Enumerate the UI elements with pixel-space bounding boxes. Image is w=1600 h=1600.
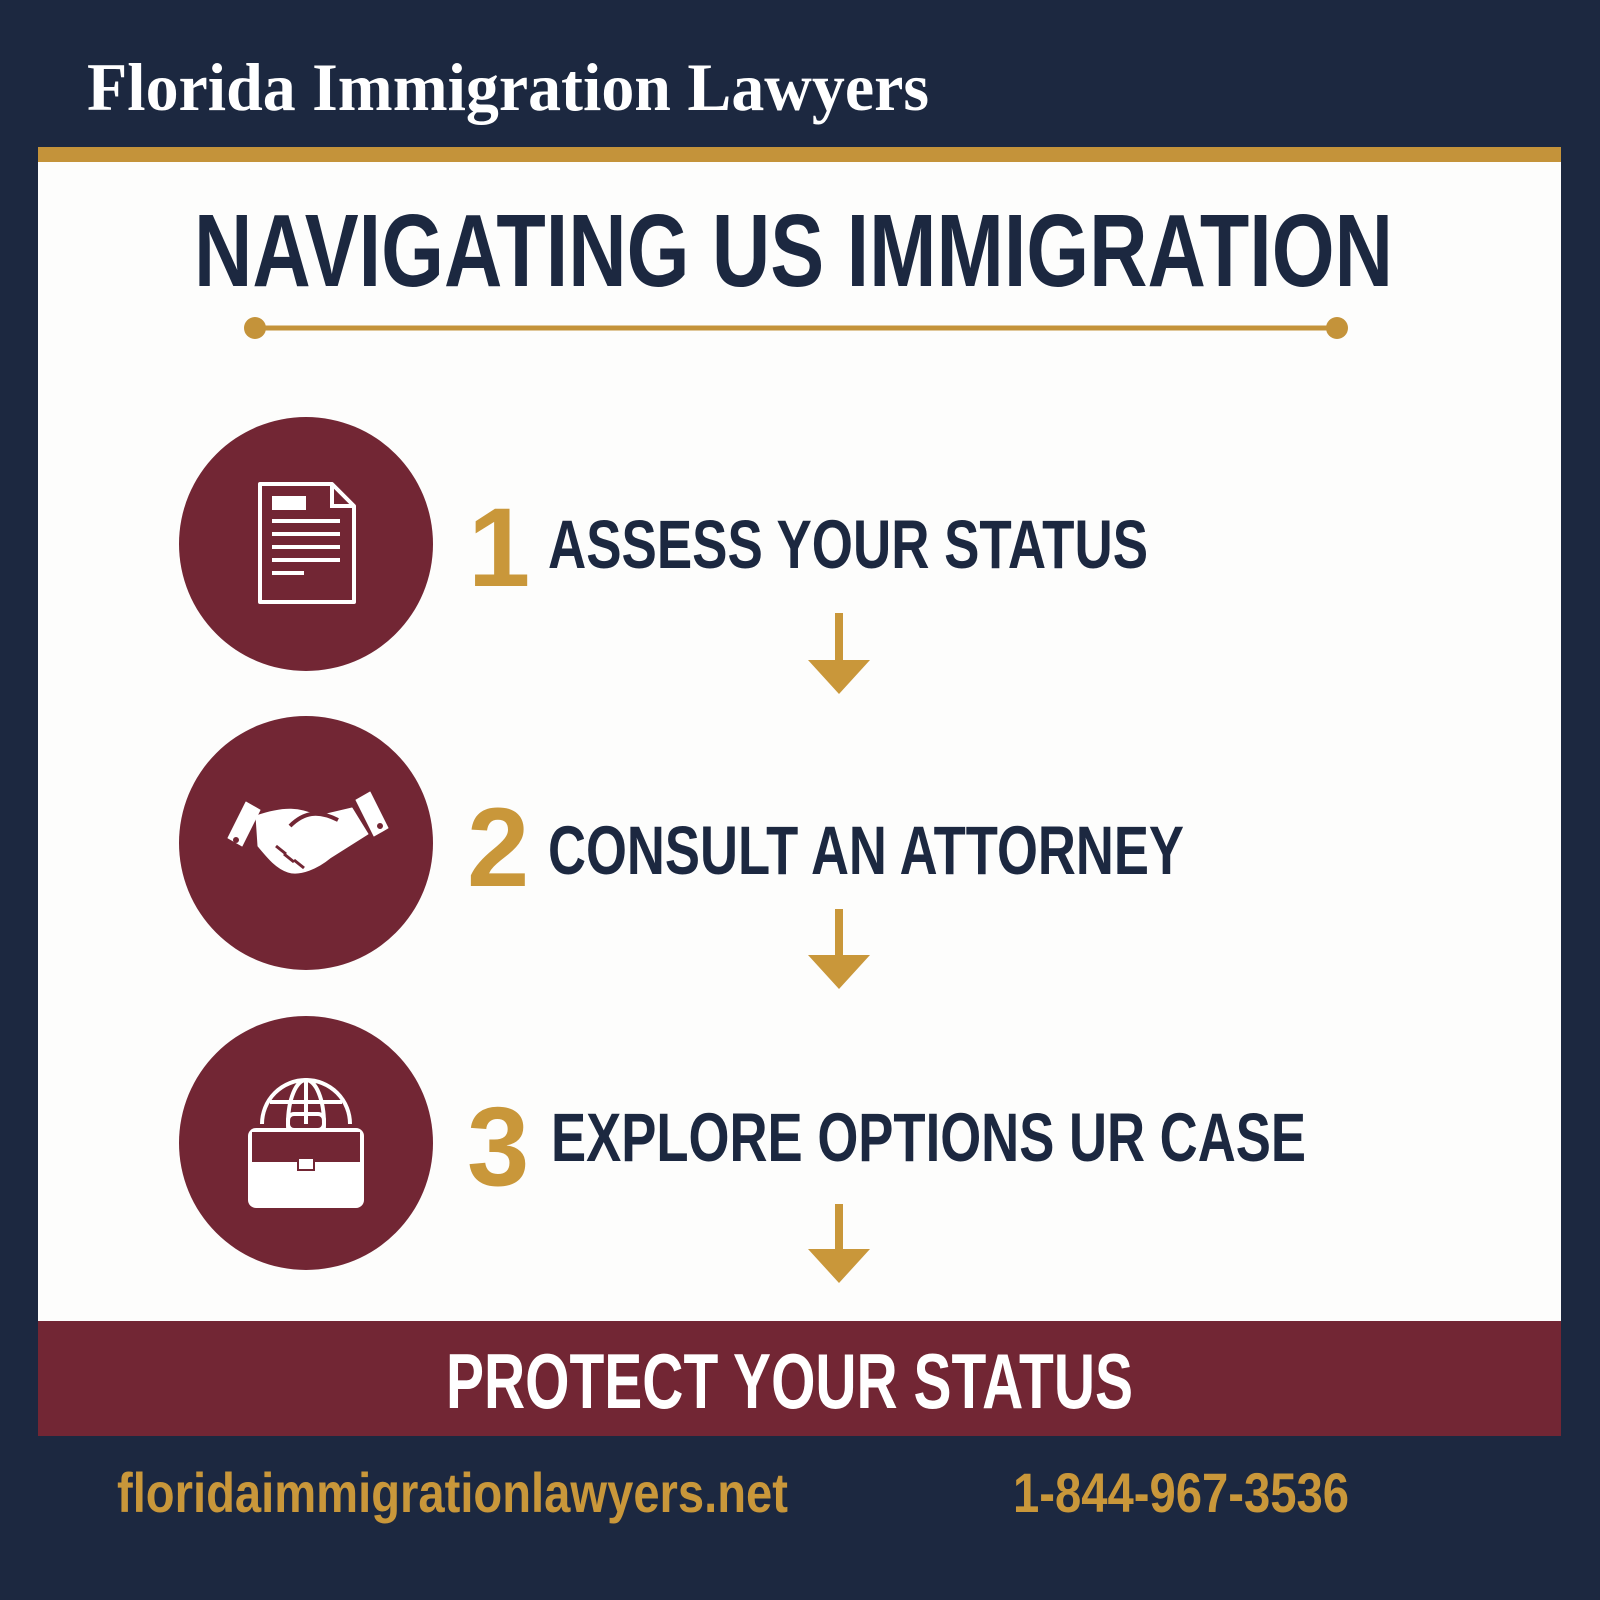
step 2 label: CONSULT AN ATTORNEY xyxy=(548,812,1184,889)
step 2 xyxy=(179,716,1184,970)
banner: protect your status xyxy=(38,1321,1561,1436)
number 3: 3 xyxy=(467,1084,529,1209)
number 1: 1 xyxy=(468,485,530,610)
step 1 label: ASSESS YOUR STATUS xyxy=(548,506,1148,583)
main white panel xyxy=(38,162,1561,1321)
banner: protect your status: PROTECT YOUR STATUS xyxy=(446,1337,1133,1425)
arrow 1 xyxy=(808,613,870,694)
footer: phone: 1-844-967-3536 xyxy=(1013,1461,1349,1524)
step 1 xyxy=(179,417,1148,671)
step 3 label: EXPLORE OPTIONS UR CASE xyxy=(551,1099,1306,1176)
arrow 2 xyxy=(808,909,870,989)
step 3 xyxy=(179,1016,1306,1270)
icon: globe briefcase xyxy=(179,1016,433,1270)
header: firm name: Florida Immigration Lawyers xyxy=(87,49,929,125)
arrow 3 xyxy=(808,1204,870,1283)
icon: document xyxy=(179,417,433,671)
title divider xyxy=(244,317,1348,339)
gold header bar xyxy=(38,147,1561,162)
footer: website: floridaimmigrationlawyers.net xyxy=(117,1461,788,1524)
number 2: 2 xyxy=(467,785,529,910)
icon: handshake xyxy=(179,716,433,970)
